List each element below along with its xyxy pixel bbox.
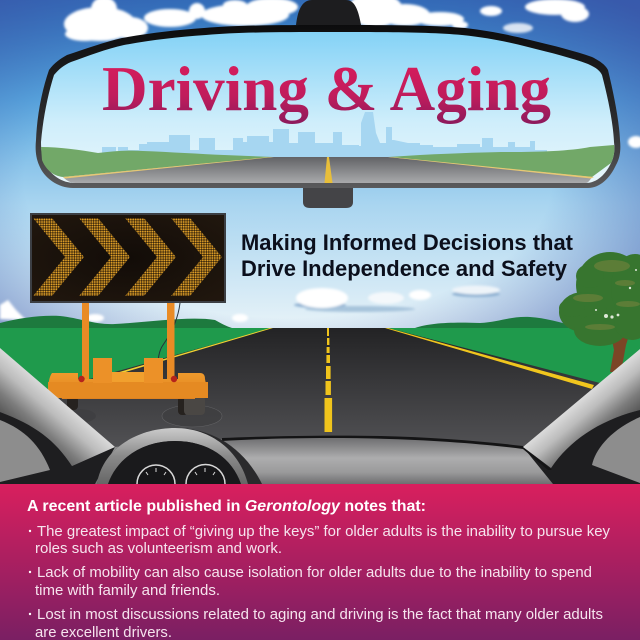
sky background	[0, 0, 640, 330]
right road edge line	[385, 328, 594, 389]
skyline	[102, 112, 547, 158]
mirror glass	[41, 32, 614, 183]
bullet list: Lack of mobility can also cause isolation for older adults due to the inability to spend	[37, 564, 592, 581]
steering wheel	[97, 428, 262, 484]
dark interior base	[0, 410, 640, 484]
mirror centre line	[324, 157, 332, 183]
mirror frame	[36, 25, 620, 188]
mirror road	[63, 157, 592, 183]
left road edge line	[116, 328, 273, 373]
panel heading: A recent article published in Gerontology notes that:	[27, 498, 426, 515]
subtitle: Making Informed Decisions that	[241, 230, 574, 255]
bullet list: time with family and friends.	[35, 582, 220, 599]
trailer body	[48, 373, 208, 399]
car dashboard and pillars	[0, 348, 640, 484]
title: Driving & Aging	[102, 54, 551, 124]
rear-view mirror	[36, 0, 620, 208]
left pillar	[0, 348, 115, 466]
wheels	[67, 396, 205, 415]
dot chevrons	[33, 218, 222, 296]
tree	[559, 252, 640, 372]
bullet list: The greatest impact of “giving up the keys” for older adults is the inability to pursue key	[37, 523, 610, 540]
gauges	[137, 464, 225, 484]
battery boxes	[93, 358, 163, 383]
green landscape	[0, 316, 640, 418]
sign board	[30, 213, 226, 303]
message sign trailer	[30, 213, 226, 427]
bullet list	[29, 523, 610, 640]
mirror mount	[296, 0, 361, 25]
dashboard top	[95, 437, 553, 484]
subtitle	[241, 230, 574, 281]
right side window	[592, 417, 640, 483]
centre dashes	[324, 328, 332, 432]
panel: article notes	[0, 484, 640, 640]
mid-sky clouds	[0, 286, 500, 322]
left side window	[0, 420, 50, 482]
mirror lower tab	[303, 186, 353, 208]
clouds behind mirror	[64, 0, 640, 148]
mirror hills right	[388, 145, 614, 177]
right pillar	[523, 349, 640, 468]
mirror hills left	[41, 147, 273, 177]
cable	[157, 303, 180, 372]
road	[0, 328, 640, 470]
bullet list: Lost in most discussions related to aging and driving is the fact that many older adults	[37, 606, 603, 623]
red lights	[78, 376, 177, 382]
subtitle: Drive Independence and Safety	[241, 256, 568, 281]
posts	[82, 302, 174, 380]
mirror road edges	[63, 157, 274, 178]
wheel shadows	[60, 405, 222, 427]
bullet list: roles such as volunteerism and work.	[35, 540, 282, 557]
